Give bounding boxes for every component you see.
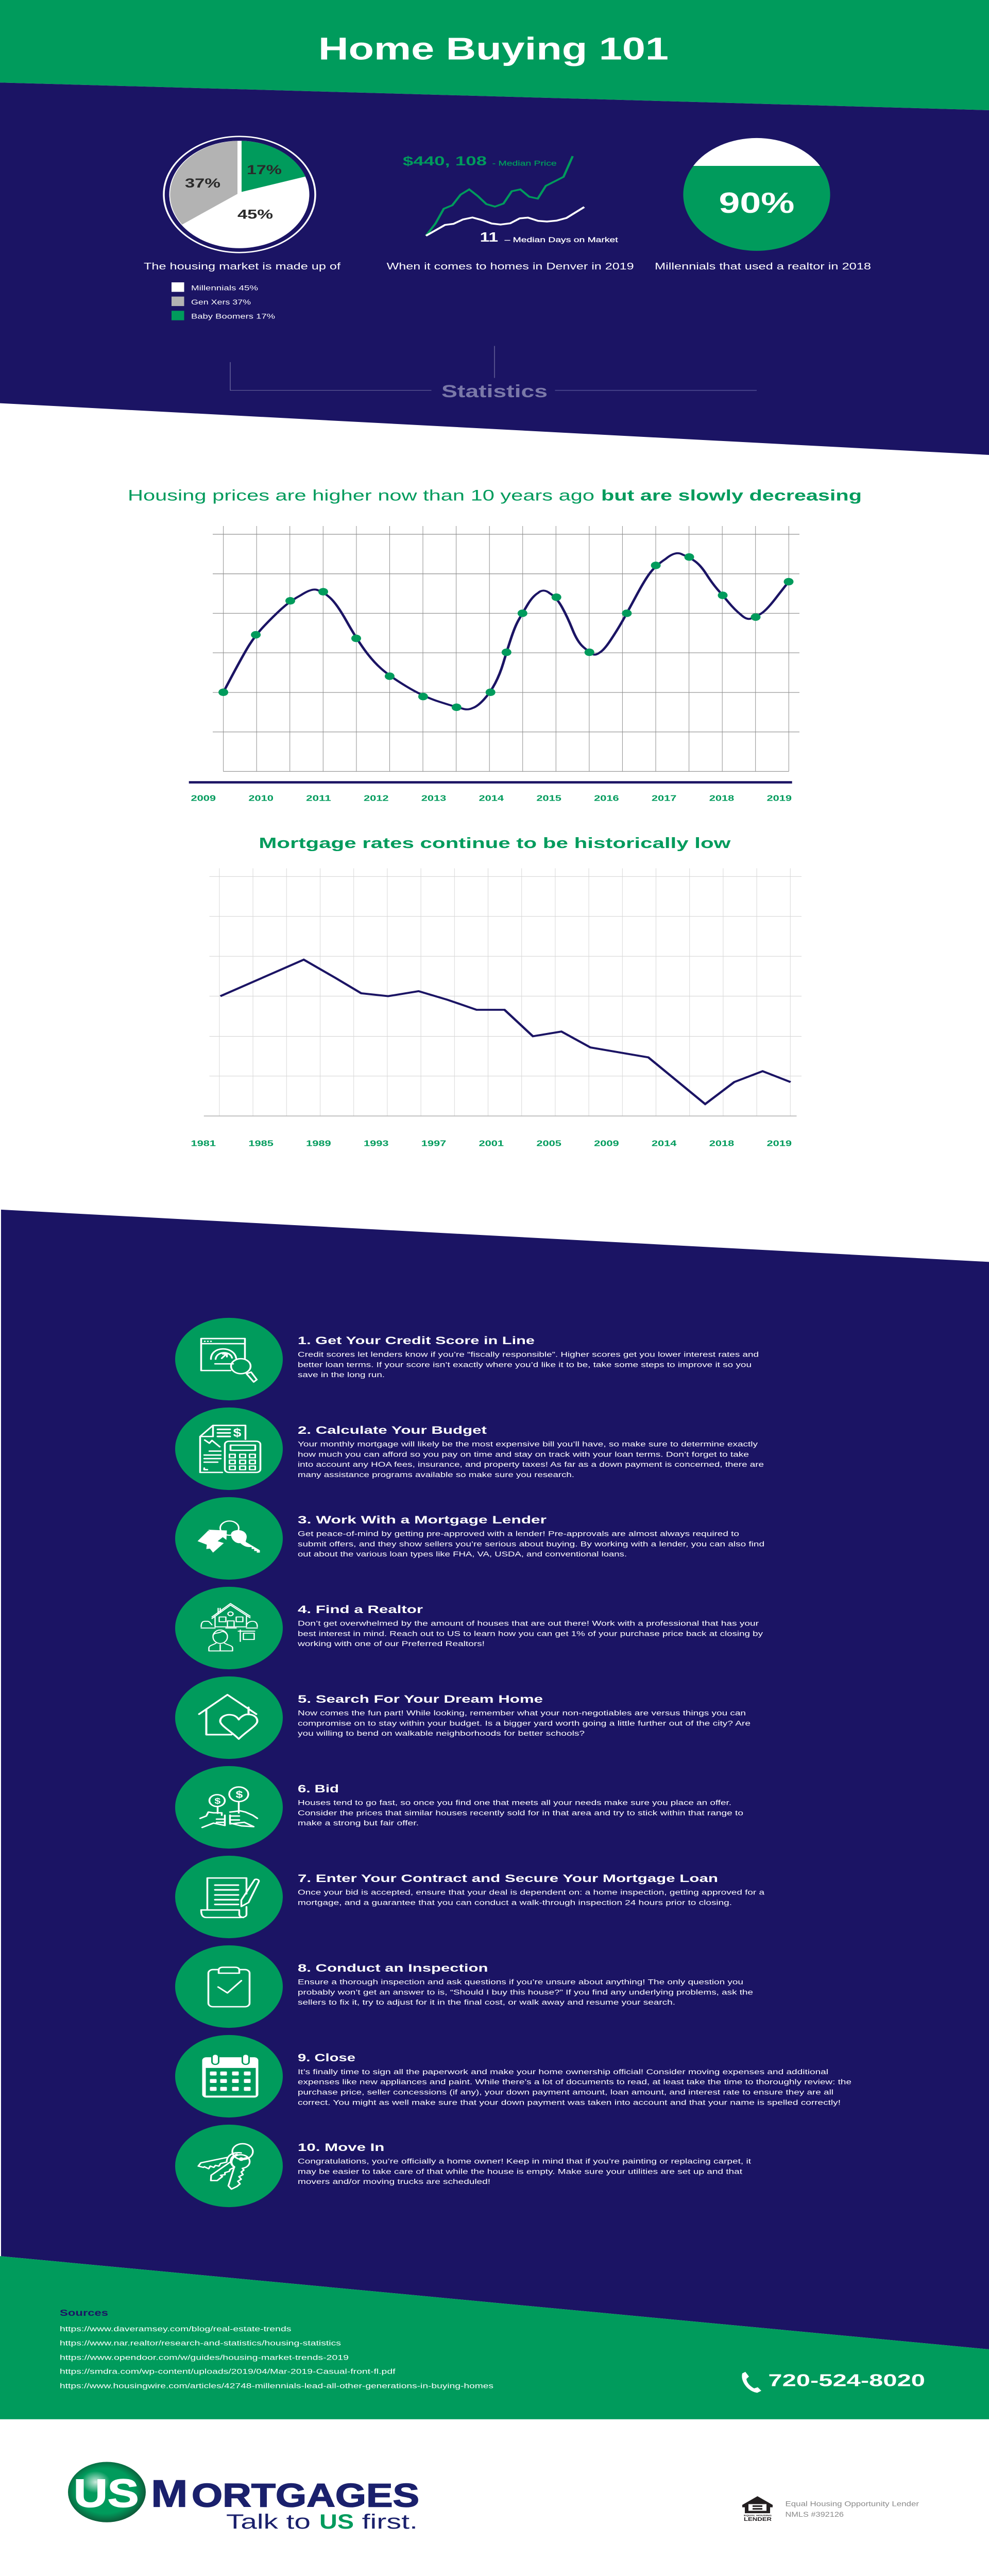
step 5 heading: 5. Search For Your Dream Home [298,1693,543,1705]
chart: mortgage rates line chart [191,868,802,1148]
step 5 body [298,1709,751,1738]
panel: statistics [0,82,989,455]
step 3 body [298,1530,764,1558]
step 9 body: expenses like new appliances and paint. While there’s a lot of documents to read, at least take the time to thoroughly review: the [298,2078,851,2086]
step 9 heading: 9. Close [298,2052,355,2064]
step 5 body: compromise on to stay within your budget. Is a bigger yard worth going a little further out of the city? Are [298,1719,751,1727]
icon: home with heart [199,1695,258,1739]
step 5 body: you willing to bend on walkable neighborhoods for better schools? [298,1730,585,1738]
step 8 heading: 8. Conduct an Inspection [298,1962,488,1974]
step 6 [175,1766,743,1849]
icon: clipboard with check [208,1967,249,2007]
step 6 heading: 6. Bid [298,1783,339,1795]
year labels: 2009 [191,794,216,803]
step 9 body: It’s finally time to sign all the paperwork and make your home ownership official! Consider moving expenses and additional [298,2068,828,2076]
logo: US Mortgages: US [74,2471,139,2515]
step 3 heading: 3. Work With a Mortgage Lender [298,1514,547,1526]
step 4 body: working with one of our Preferred Realtors! [297,1640,485,1648]
pie legend: Gen Xers 37% [191,298,251,306]
line chart: Denver median price and days on market: – Median Days on Market [505,236,618,244]
step 7 [175,1856,764,1938]
step 9 body: correct. You might as well make sure that your down payment was taken into account and that your name is spelled correctly! [298,2098,841,2107]
line chart: Denver median price and days on market: - Median Price [492,160,557,167]
step 6 body: Consider the prices that similar houses recently sold for in that area and try to stick within that range to [298,1809,743,1817]
lender text: Equal Housing Opportunity Lender [785,2500,919,2508]
year labels: 2009 [594,1139,619,1148]
sources list: https://www.housingwire.com/articles/42748-millennials-lead-all-other-generations-in-buying-homes [60,2382,493,2390]
year labels: 2001 [479,1139,504,1148]
icon: budget documents and calculator: $ [233,1426,242,1439]
step 7 body: Once your bid is accepted, ensure that your deal is dependent on: a home inspection, getting approved for a [298,1888,764,1896]
sources list: https://www.opendoor.com/w/guides/housing-market-trends-2019 [60,2353,349,2362]
step 8 body: probably won’t get an answer to is, “Should I buy this house?” If you find any underlying problems, ask the [298,1988,753,1996]
year labels: 1997 [421,1139,446,1148]
step 10 [175,2125,752,2207]
logo: US Mortgages: Talk to [226,2510,311,2533]
pie chart: housing market generations: 45% [237,207,273,222]
step 8 body: Ensure a thorough inspection and ask questions if you’re unsure about anything! The only question you [298,1978,743,1986]
heading: housing prices: Housing prices are higher now than 10 years ago [128,487,594,504]
pie legend [172,282,275,320]
year labels: 2019 [767,794,792,803]
step 9 [175,2035,851,2117]
pie legend: Baby Boomers 17% [191,313,275,320]
icon: bidding paddles [200,1787,258,1827]
title: Home Buying 101 [318,31,669,67]
rate line [220,960,791,1104]
logo: US Mortgages: M [151,2472,188,2515]
year labels: 2019 [767,1139,792,1148]
phone number: 720-524-8020 [768,2371,925,2390]
step 8 body [298,1978,753,2007]
step 2 heading: 2. Calculate Your Budget [298,1424,487,1436]
step 6 body: make a strong but fair offer. [298,1819,419,1827]
header banner [0,0,989,110]
line chart: Denver median price and days on market [403,154,618,245]
step 2 body [298,1440,764,1479]
step 1 body: better loan terms. If your score isn’t exactly where you’d like it to be, take some steps to improve it so you [298,1361,752,1369]
icon: contract and pencil [201,1878,259,1918]
year labels: 1993 [364,1139,389,1148]
year labels [191,1139,792,1148]
step 1 body: Credit scores let lenders know if you’re “fiscally responsible”. Higher scores get you lower interest rates and [298,1350,759,1359]
pie chart: housing market generations: 17% [247,163,282,177]
step 3 body: submit offers, and they show sellers you’re serious about buying. By working with a lender, you can also find [298,1540,764,1548]
sources list [60,2325,493,2390]
line chart: Denver median price and days on market: 11 [480,230,498,245]
line chart caption: When it comes to homes in Denver in 2019 [387,261,634,272]
gauge caption: Millennials that used a realtor in 2018 [655,261,871,272]
axis bar [189,781,792,784]
statistics label with bracket: Statistics [441,382,548,401]
sources list: https://smdra.com/wp-content/uploads/2019/04/Mar-2019-Casual-front-fl.pdf [60,2367,396,2376]
year labels: 2014 [479,794,504,803]
step 10 heading: 10. Move In [298,2141,384,2154]
pie caption: The housing market is made up of [144,261,340,272]
lender text: NMLS #392126 [785,2511,844,2518]
year labels: 1981 [191,1139,216,1148]
year labels: 2016 [594,794,619,803]
chart: housing prices line chart [189,526,799,803]
icon: phone [742,2372,761,2393]
step 3 [175,1497,764,1580]
panel: sources footer [0,2256,989,2419]
year labels: 2014 [652,1139,677,1148]
step 1 [175,1318,759,1400]
year labels: 1985 [248,1139,274,1148]
step 2 [175,1408,764,1490]
equal housing lender logo [742,2496,773,2522]
sources list: https://www.daveramsey.com/blog/real-estate-trends [60,2325,291,2333]
statistics label with bracket [230,346,757,401]
gauge: 90 percent circle: 90% [719,187,795,219]
icon: budget documents and calculator [200,1426,261,1472]
heading: housing prices [128,487,862,504]
data points [218,553,794,711]
step 7 heading: 7. Enter Your Contract and Secure Your Mortgage Loan [298,1872,718,1885]
lender text [785,2500,919,2518]
icon: realtor and house [201,1603,258,1651]
step 6 body [298,1799,743,1827]
logo: US Mortgages: US [319,2510,354,2533]
step 10 body: may be easier to take care of that while the house is empty. Make sure your utilities are set up and that [298,2167,743,2176]
panel: steps background [0,1210,989,2349]
year labels: 2010 [248,794,274,803]
equal housing lender logo: EQUAL HOUSING [744,2515,772,2517]
step 2 body: how much you can afford so you pay on time and stay on track with your loan terms. Don’t forget to take [298,1450,749,1459]
step 10 body: Congratulations, you’re officially a home owner! Keep in mind that if you’re painting or replacing carpet, it [298,2157,752,2165]
step 2 body: into account any HOA fees, insurance, and property taxes! As far as a down payment is concerned, there are [298,1461,764,1469]
step 4 body: best interest in mind. Reach out to US to learn how you can get 1% of your purchase price back at closing by [298,1630,763,1638]
icon: house tag and key [198,1521,260,1553]
icon: bidding paddles: $ [214,1796,221,1806]
year labels: 2013 [421,794,446,803]
year labels: 2005 [536,1139,561,1148]
step 6 body: Houses tend to go fast, so once you find one that meets all your needs make sure you place an offer. [298,1799,731,1807]
equal housing lender logo: LENDER [744,2517,772,2522]
step 4 body: Don’t get overwhelmed by the amount of houses that are out there! Work with a professional that has your [298,1619,759,1628]
icon: bunch of keys [198,2144,253,2189]
year labels: 2015 [536,794,561,803]
icon: calendar [202,2054,259,2097]
step 5 [175,1676,751,1759]
step 2 body: Your monthly mortgage will likely be the most expensive bill you’ll have, so make sure to determine exactly [298,1440,758,1448]
step 2 body: many assistance programs available so make sure you research. [298,1471,574,1479]
step 1 body [298,1350,759,1379]
line chart: Denver median price and days on market: $440, 108 [403,154,487,168]
logo: US Mortgages [68,2462,419,2533]
step 9 body: purchase price, seller concessions (if any), your down payment amount, loan amount, and interest rate to ensure they are all [298,2089,833,2096]
heading: mortgage rates: Mortgage rates continue to be historically low [259,835,731,851]
year labels: 2018 [709,794,734,803]
step 5 body: Now comes the fun part! While looking, remember what your non-negotiables are versus things you can [298,1709,746,1717]
step 3 body: Get peace-of-mind by getting pre-approved with a lender! Pre-approvals are almost always required to [298,1530,739,1538]
step 1 body: save in the long run. [298,1371,385,1379]
icon: credit score window [201,1338,257,1382]
gauge: 90 percent circle [683,138,830,251]
step 4 heading: 4. Find a Realtor [298,1603,423,1616]
year labels: 1989 [306,1139,331,1148]
logo: US Mortgages: first. [362,2510,418,2533]
step 7 body [298,1888,764,1907]
year labels: 2018 [709,1139,734,1148]
icon: bidding paddles: $ [236,1789,243,1800]
pie chart: housing market generations: 37% [185,176,220,191]
pie legend: Millennials 45% [191,284,258,292]
step 8 [175,1945,753,2028]
year labels: 2011 [306,794,331,803]
step 10 body [298,2157,752,2186]
year labels: 2012 [364,794,389,803]
sources list: https://www.nar.realtor/research-and-statistics/housing-statistics [60,2340,341,2347]
year labels [191,794,792,803]
year labels: 2017 [652,794,677,803]
step 4 body [297,1619,763,1648]
step 4 [175,1587,763,1669]
step 7 body: mortgage, and a guarantee that you can conduct a walk-through inspection 24 hours prior to closing. [298,1899,732,1907]
step 10 body: movers and/or moving trucks are scheduled! [298,2178,490,2186]
step 9 body [298,2068,851,2107]
price curve [224,553,789,709]
step 1 heading: 1. Get Your Credit Score in Line [298,1334,535,1347]
logo: US Mortgages: ORTGAGES [192,2477,419,2514]
step 8 body: sellers to fix it, try to adjust for it in the final cost, or walk away and resume your search. [298,1998,675,2007]
step 3 body: out about the various loan types like FHA, VA, USDA, and conventional loans. [298,1550,627,1558]
sources heading: Sources [60,2308,108,2318]
heading: housing prices: but are slowly decreasing [601,487,862,504]
pie chart: housing market generations [164,137,315,252]
